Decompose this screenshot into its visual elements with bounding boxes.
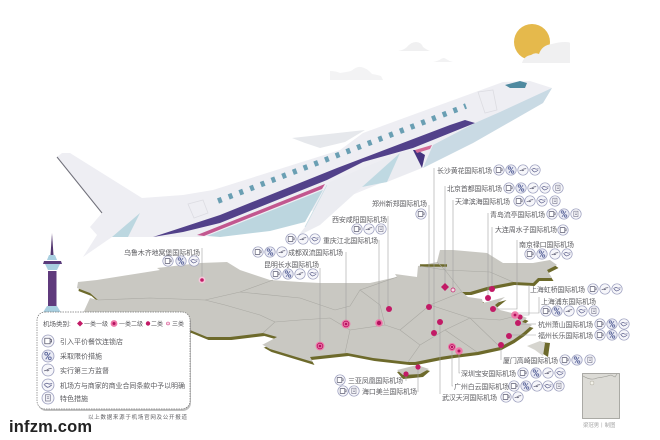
- label: 武汉天河国际机场: 武汉天河国际机场: [442, 393, 497, 402]
- label: 武汉天河国际机场: [437, 319, 523, 402]
- label: 长沙黄花国际机场: 长沙黄花国际机场: [437, 166, 492, 175]
- main wing: [298, 150, 422, 236]
- map of China: [77, 250, 558, 379]
- base: [42, 306, 62, 314]
- observation deck: [47, 255, 57, 260]
- label: 杭州萧山国际机场: [515, 319, 629, 329]
- label: 天津滨海国际机场: 天津滨海国际机场: [455, 197, 510, 206]
- label: 大连周水子国际机场: 大连周水子国际机场: [495, 225, 557, 234]
- label: 郑州新郑国际机场: [372, 199, 432, 310]
- label: 郑州新郑国际机场: 郑州新郑国际机场: [372, 199, 427, 208]
- label: 北京首都国际机场: [441, 183, 563, 291]
- label: 上海浦东国际机场: [511, 297, 599, 319]
- legend category row: [43, 319, 184, 328]
- label: 厦门高崎国际机场: [498, 342, 595, 365]
- label: 重庆江北国际机场: 重庆江北国际机场: [323, 236, 378, 245]
- legend item: 特色措施: 特色措施: [60, 394, 88, 403]
- label: 广州白云国际机场: 广州白云国际机场: [454, 382, 509, 391]
- windows: [218, 106, 466, 201]
- pink stripe: [197, 184, 325, 236]
- nose belly: [423, 88, 552, 168]
- label: 深圳宝安国际机场: [455, 347, 565, 378]
- label: 长沙黄花国际机场: [431, 165, 540, 336]
- label: 三亚凤凰国际机场: [335, 371, 409, 385]
- label: 海口美兰国际机场: 海口美兰国际机场: [362, 387, 417, 396]
- cloud: left: [330, 67, 383, 80]
- inset: South China Sea map: [582, 374, 620, 429]
- tail stabilizer: [83, 205, 165, 257]
- label: 大连周水子国际机场: [489, 225, 568, 292]
- legend category row: 一类一级: [84, 320, 108, 328]
- label: 昆明长水国际机场: [264, 260, 324, 350]
- label: 南京禄口国际机场: 南京禄口国际机场: [519, 240, 574, 249]
- label: 三亚凤凰国际机场: 三亚凤凰国际机场: [348, 376, 403, 385]
- north edge relief: [420, 264, 447, 267]
- legend item: 引入平价餐饮连锁店: 引入平价餐饮连锁店: [60, 337, 123, 346]
- map coast relief: [78, 253, 558, 365]
- legend item: 引入平价餐饮连锁店: [42, 335, 123, 347]
- label: 青岛流亭国际机场: [485, 209, 581, 301]
- legend category row: 机场类别:: [43, 319, 71, 328]
- spire: [50, 233, 54, 255]
- legend panel: [37, 312, 191, 411]
- tail fin: [57, 153, 160, 225]
- label: 杭州萧山国际机场: 杭州萧山国际机场: [538, 320, 593, 329]
- label: 昆明长水国际机场: 昆明长水国际机场: [264, 260, 319, 269]
- label: 上海虹桥国际机场: 上海虹桥国际机场: [530, 285, 585, 294]
- wing strut: [305, 185, 327, 227]
- label: 广州白云国际机场: [448, 343, 564, 391]
- label: 福州长乐国际机场: 福州长乐国际机场: [538, 331, 593, 340]
- province borders: [98, 262, 520, 362]
- label: 乌鲁木齐地窝堡国际机场: 乌鲁木齐地窝堡国际机场: [124, 248, 200, 257]
- Taiwan: [540, 342, 550, 357]
- purple stripe: [153, 120, 475, 237]
- wing root: [413, 150, 425, 168]
- label: 海口美兰国际机场: [338, 364, 421, 396]
- sun: [514, 24, 550, 60]
- tower: [42, 233, 62, 314]
- source note: 以上数据来源于机场官网及公开报道: [88, 413, 187, 421]
- cockpit window: [505, 81, 527, 88]
- label: 重庆江北国际机场: [286, 234, 383, 327]
- label: 福州长乐国际机场: [506, 330, 629, 340]
- label: 天津滨海国际机场: [451, 196, 560, 292]
- watermark: infzm.com: [9, 418, 92, 436]
- label: 深圳宝安国际机场: 深圳宝安国际机场: [461, 369, 516, 378]
- cloud: small lower: [433, 58, 453, 62]
- wing blue: [362, 153, 400, 187]
- label: 乌鲁木齐地窝堡国际机场: [124, 248, 205, 283]
- cloud: small upper: [398, 42, 430, 51]
- label: 成都双流国际机场: 成都双流国际机场: [288, 248, 343, 257]
- far wing: [292, 130, 365, 148]
- cloud beside the sun: [522, 42, 570, 63]
- rear belly: [207, 190, 323, 237]
- inset caption: 梁冠男丨制图: [583, 421, 615, 429]
- label: 西安咸阳国际机场: 西安咸阳国际机场: [332, 215, 387, 224]
- legend item: 实行第三方监督: 实行第三方监督: [60, 366, 109, 375]
- legend item: 特色措施: [42, 392, 88, 404]
- legend item: 机场方与商家的商业合同条款中予以明确: [42, 379, 185, 391]
- label: 青岛流亭国际机场: 青岛流亭国际机场: [490, 210, 545, 219]
- airplane: [57, 81, 552, 257]
- legend category row: 二类: [151, 320, 163, 328]
- label: 西安咸阳国际机场: [332, 215, 392, 312]
- stabilizer blue: [112, 213, 140, 237]
- label: 成都双流国际机场: [253, 247, 350, 328]
- legend item: 机场方与商家的商业合同条款中予以明确: 机场方与商家的商业合同条款中予以明确: [60, 381, 185, 390]
- legend category row: 一类二级: [119, 320, 143, 328]
- label: 北京首都国际机场: 北京首都国际机场: [447, 184, 502, 193]
- shaft: [48, 271, 56, 307]
- label: 上海浦东国际机场: 上海浦东国际机场: [541, 297, 596, 306]
- label: 厦门高崎国际机场: 厦门高崎国际机场: [503, 356, 558, 365]
- legend item: 采取限价措施: 采取限价措施: [60, 352, 102, 360]
- label: 上海虹桥国际机场: [517, 284, 622, 320]
- legend item: 实行第三方监督: [42, 364, 109, 376]
- label: 南京禄口国际机场: [490, 240, 574, 312]
- doors: [188, 90, 497, 218]
- fin leading edge: [57, 157, 102, 213]
- map land: [77, 250, 557, 362]
- fuselage: [102, 81, 552, 237]
- legend category row: 三类: [172, 320, 184, 328]
- legend item: 采取限价措施: [42, 350, 102, 362]
- Hainan: [397, 367, 430, 379]
